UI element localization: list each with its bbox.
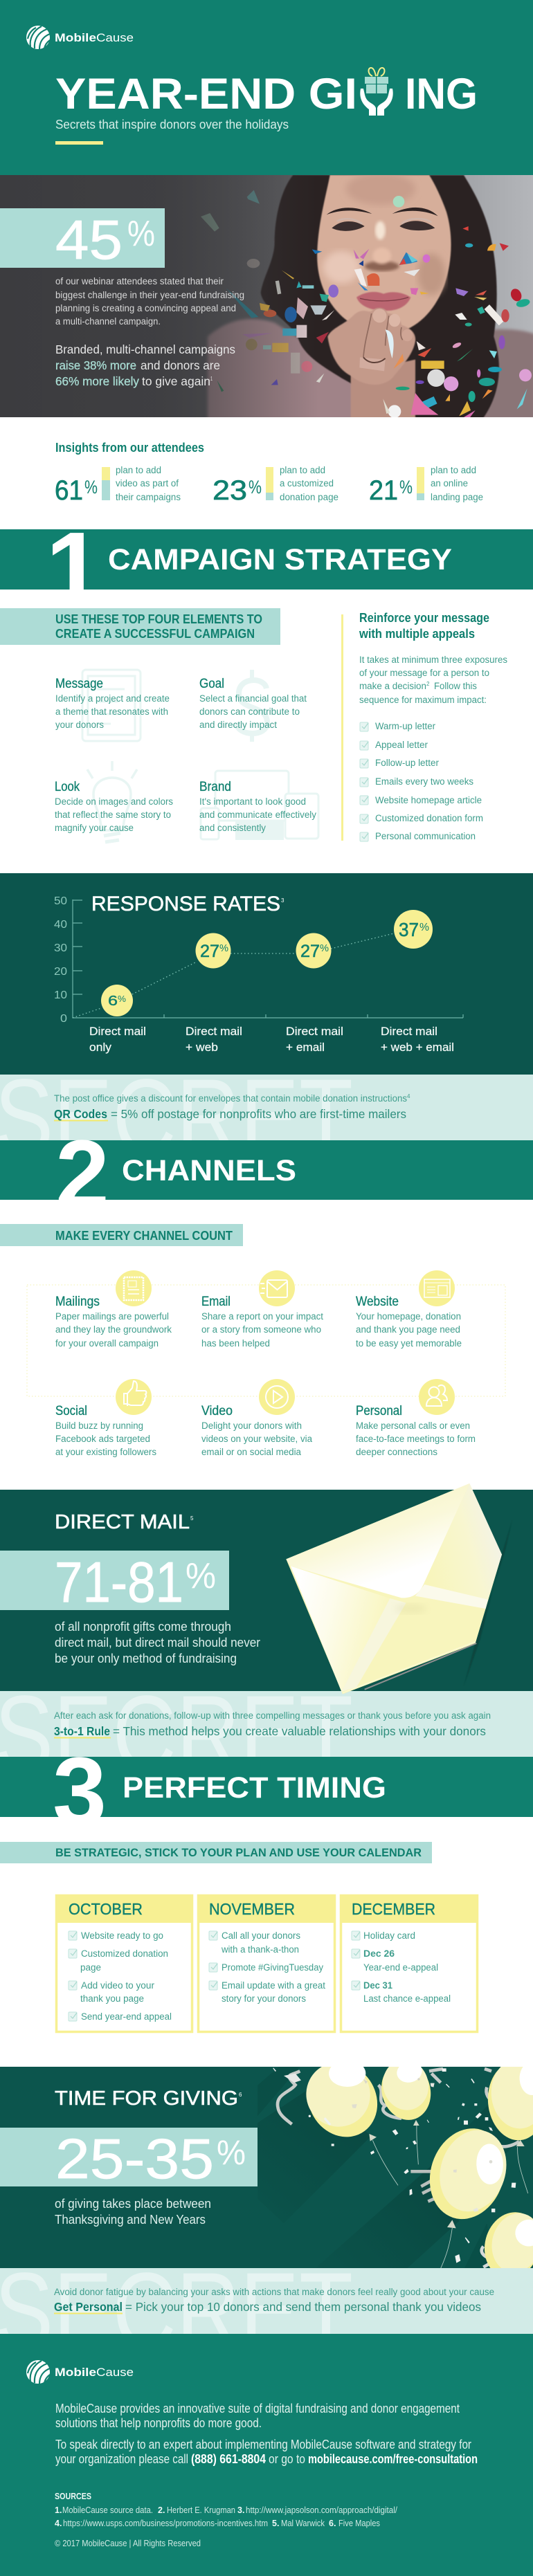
element: brand: It's important to look good — [199, 796, 306, 807]
highlighted tip: = Pick your top 10 donors and send them personal thank you videos — [125, 2300, 481, 2314]
statistic box — [0, 208, 165, 271]
chart title: RESPONSE RATES — [91, 893, 280, 915]
hero paragraph: of our webinar attendees stated that their — [55, 276, 224, 286]
logo — [26, 26, 134, 49]
data point: 37%: 37 — [399, 919, 419, 940]
calendar: december: Holiday card — [363, 1930, 415, 1941]
icon: people — [419, 1379, 455, 1415]
heading box: BE STRATEGIC, STICK TO YOUR PLAN AND USE YOUR CALENDAR — [55, 1846, 422, 1859]
channel: social: Social — [55, 1404, 87, 1418]
category labels: Direct mail — [89, 1025, 146, 1038]
watermark: SECRET — [0, 1057, 353, 1178]
element: goal: Select a financial goal that — [199, 693, 307, 704]
highlighted tip: 3-to-1 Rule — [54, 1724, 110, 1738]
stat: 61%: % — [84, 477, 98, 497]
element: message: Message — [55, 677, 103, 691]
heading: Insights from our attendees — [55, 441, 204, 455]
calendar: october: Send year-end appeal — [81, 2011, 172, 2022]
element: goal: donors can contribute to — [199, 706, 300, 717]
heading: Reinforce your message — [359, 611, 489, 625]
highlighted tip: = 5% off postage for nonprofits who are first-time mailers — [111, 1107, 406, 1121]
checklist — [360, 721, 483, 841]
paragraph: Follow this — [434, 681, 477, 691]
logo: Mobile — [55, 31, 96, 44]
axis labels: 10 — [54, 989, 67, 1001]
sources: 4. — [55, 2519, 62, 2528]
subtitle: Secrets that inspire donors over the holidays — [55, 118, 289, 131]
category labels: only — [89, 1041, 112, 1054]
checklist: Follow-up letter — [375, 758, 439, 768]
section band: 2 channels: CHANNELS — [122, 1154, 296, 1187]
channel: email: has been helped — [201, 1338, 270, 1349]
panel: secret get personal — [0, 2268, 533, 2334]
calendar: november: story for your donors — [222, 1993, 306, 2004]
sources: Mal Warwick — [281, 2519, 325, 2528]
element: look: magnify your cause — [55, 823, 134, 833]
calendar: december: Last chance e-appeal — [363, 1993, 451, 2004]
axis labels: 0 — [60, 1013, 67, 1025]
panel: insights from attendees — [55, 441, 483, 506]
hero paragraph: planning is creating a convincing appeal and — [55, 303, 236, 313]
section band: 3 perfect timing: PERFECT TIMING — [123, 1771, 386, 1805]
chart title: 3 — [281, 897, 284, 904]
checklist: Emails every two weeks — [375, 776, 473, 787]
channel: mailings: Paper mailings are powerful — [55, 1311, 169, 1322]
sources: Five Maples — [338, 2519, 380, 2528]
channel: mailings: and they lay the groundwork — [55, 1324, 172, 1335]
title: YEAR-END GI — [55, 70, 357, 118]
description: direct mail, but direct mail should never — [55, 1636, 260, 1650]
channel: email — [201, 1295, 323, 1349]
section band: 2 channels — [0, 1120, 533, 1228]
stat: 23% — [213, 465, 338, 506]
hero callout: Branded, multi-channel campaigns — [55, 342, 235, 356]
channel: email: or a story from someone who — [201, 1324, 321, 1335]
confetti — [201, 190, 532, 419]
panel: secret QR codes — [0, 1075, 533, 1140]
description: Thanksgiving and New Years — [55, 2213, 206, 2227]
sources: SOURCES — [55, 2491, 91, 2501]
data point: 27% email: 27 — [300, 942, 320, 961]
axis labels: 20 — [54, 966, 67, 978]
calendar: november — [197, 1894, 336, 2031]
calendar: november: Promote #GivingTuesday — [222, 1962, 323, 1973]
statistic box: 45 — [55, 209, 123, 271]
data point: 37% — [394, 910, 433, 949]
checklist: Personal communication — [375, 831, 476, 841]
sources: https://www.usps.com/business/promotions-incentives.htm — [63, 2519, 268, 2528]
checklist: Warm-up letter — [375, 721, 435, 731]
channel: social: at your existing followers — [55, 1447, 156, 1457]
description: of all nonprofit gifts come through — [55, 1620, 231, 1634]
stat: 21%: an online — [431, 478, 468, 488]
logo: Cause — [96, 31, 134, 44]
calendar: october: thank you page — [80, 1993, 144, 2004]
data point: 27% web: 27 — [200, 942, 219, 961]
data point: 27% web — [195, 933, 231, 969]
panel: direct mail — [0, 1490, 533, 1691]
tip text: After each ask for donations, follow-up with three compelling messages or thank yous before you ask again — [54, 1710, 491, 1721]
axis labels: 40 — [54, 919, 67, 931]
about text: solutions that help nonprofits do more good. — [55, 2416, 262, 2430]
icon: gift in hands — [360, 68, 393, 116]
paragraph: sequence for maximum impact: — [359, 695, 487, 705]
panel: footer — [0, 2334, 533, 2576]
panel: calendar — [0, 1842, 478, 2031]
stat: 21%: 21 — [369, 475, 398, 506]
panel: time for giving — [0, 2067, 533, 2268]
calendar: november: Call all your donors — [222, 1930, 300, 1941]
element: goal: Goal — [199, 677, 224, 691]
heading — [359, 611, 489, 641]
divider line — [341, 614, 343, 841]
tip footnote: 4 — [407, 1093, 410, 1099]
data point: 27% email: % — [320, 942, 329, 954]
data point: 6%: % — [118, 994, 126, 1004]
sources: 1. — [55, 2505, 62, 2515]
dark fade over left of photo — [118, 175, 307, 417]
title: ING — [405, 70, 478, 118]
dotted connector frame — [27, 1285, 505, 1396]
stat: 21% — [369, 465, 483, 506]
copyright: © 2017 MobileCause | All Rights Reserved — [55, 2539, 201, 2548]
stat: 21%: % — [399, 477, 413, 497]
calendar: december: Dec 26 — [363, 1948, 395, 1959]
calendar: october — [55, 1894, 193, 2031]
category labels — [89, 1025, 454, 1054]
channel: personal — [356, 1404, 476, 1457]
calendar: november: Email update with a great — [222, 1980, 325, 1991]
data point: 6%: 6 — [108, 994, 118, 1009]
yellow accent bar — [55, 141, 103, 145]
calendar: november: NOVEMBER — [209, 1900, 295, 1918]
hero callout: and donors are — [141, 358, 220, 372]
statistic box: % — [186, 1556, 216, 1596]
heading box — [0, 1842, 432, 1863]
data point: 37%: % — [419, 922, 429, 933]
category labels: + web — [186, 1041, 218, 1054]
stat: 61%: their campaigns — [116, 492, 181, 502]
channel: video: email or on social media — [201, 1447, 301, 1457]
channel: website: Website — [356, 1295, 399, 1309]
sources: 5. — [272, 2519, 279, 2528]
sources — [55, 2491, 397, 2528]
icon: light bulb — [87, 761, 137, 842]
sources: 3. — [237, 2505, 244, 2515]
category labels: + email — [286, 1041, 325, 1054]
face — [317, 175, 451, 335]
photo: woman blowing confetti — [0, 173, 533, 419]
channel: email: Share a report on your impact — [201, 1311, 323, 1322]
section band: 3 perfect timing — [0, 1737, 533, 1845]
channel: website: and thank you page need — [356, 1324, 460, 1335]
stat: 21%: landing page — [431, 492, 483, 502]
chart axes — [73, 899, 463, 1018]
element: look: Decide on images and colors — [55, 796, 173, 807]
channel: email: Email — [201, 1295, 231, 1309]
panel: header — [0, 0, 533, 175]
ring — [359, 357, 386, 371]
icon: envelope — [259, 1270, 295, 1306]
contact text: mobilecause.com/free-consultation — [308, 2452, 478, 2466]
tip text: The post office gives a discount for envelopes that contain mobile donation instructions — [54, 1093, 407, 1104]
calendar: december: Dec 31 — [363, 1980, 392, 1991]
section band: 3 perfect timing: 3 — [53, 1737, 107, 1845]
highlighted tip: QR Codes — [54, 1107, 107, 1121]
stat: 61%: 61 — [55, 475, 83, 506]
hero callout: 66% more likely — [55, 374, 139, 388]
calendar: december: DECEMBER — [352, 1900, 435, 1918]
stat: 61% — [55, 465, 181, 506]
element: message: your donors — [55, 720, 104, 730]
statistic box: 25-35 — [55, 2128, 214, 2191]
checklist: Website homepage article — [375, 795, 482, 805]
stat: 23%: 23 — [213, 475, 247, 506]
heading box: CREATE A SUCCESSFUL CAMPAIGN — [55, 627, 255, 641]
stat: 23%: donation page — [280, 492, 338, 502]
contact text: or go to — [269, 2452, 305, 2466]
calendar: october: page — [80, 1962, 101, 1973]
contact text: your organization please call — [55, 2452, 188, 2466]
channel: mailings: for your overall campaign — [55, 1338, 159, 1349]
hair — [261, 175, 499, 419]
balloon B — [381, 2067, 431, 2120]
section band: 1 campaign strategy: 1 — [46, 511, 102, 625]
contact text — [55, 2438, 478, 2466]
element: message: Identify a project and create — [55, 693, 170, 704]
checklist: Customized donation form — [375, 813, 483, 823]
channel: website: Your homepage, donation — [356, 1311, 461, 1322]
channel: social: Facebook ads targeted — [55, 1434, 150, 1444]
data point: 6% — [101, 985, 133, 1016]
channel: website — [356, 1295, 462, 1349]
axis labels: 30 — [54, 942, 67, 954]
sources: http://www.japsolson.com/approach/digital/ — [246, 2505, 397, 2515]
calendar: november: with a thank-a-thon — [221, 1944, 299, 1955]
paragraph: of your message for a person to — [359, 668, 489, 678]
contact text: (888) 661-8804 — [191, 2452, 266, 2466]
icon: tablet — [82, 670, 141, 741]
paragraph — [359, 655, 507, 705]
contact text: To speak directly to an expert about implementing MobileCause software and strategy for — [55, 2438, 471, 2451]
heading: with multiple appeals — [359, 627, 475, 641]
channel: mailings — [55, 1295, 172, 1349]
axis labels — [54, 895, 67, 1025]
hero callout: to give again — [142, 374, 210, 388]
channel: personal: deeper connections — [356, 1447, 437, 1457]
section band: 2 channels: 2 — [55, 1120, 109, 1228]
category labels: Direct mail — [286, 1025, 343, 1038]
neck and wrist — [351, 360, 415, 419]
calendar: december — [340, 1894, 478, 2031]
heading box — [0, 1224, 243, 1246]
channel: social: Build buzz by running — [55, 1421, 143, 1431]
heading box: USE THESE TOP FOUR ELEMENTS TO — [55, 612, 262, 626]
balloon E — [485, 2212, 533, 2268]
icon: web page — [419, 1270, 455, 1306]
heading: 5 — [190, 1515, 194, 1522]
paragraph: 2 — [426, 681, 430, 687]
heading box — [0, 608, 280, 645]
about text — [55, 2402, 460, 2430]
element: look: that reflect the same story to — [55, 810, 171, 820]
watermark: SECRET — [0, 2251, 353, 2371]
channel: video: Delight your donors with — [201, 1421, 302, 1431]
section band: 1 campaign strategy — [0, 511, 533, 625]
balloon C — [487, 2067, 533, 2141]
panel: hero photo with statistics — [0, 173, 533, 419]
paragraph: make a decision — [359, 681, 426, 691]
calendar: october: OCTOBER — [69, 1900, 143, 1918]
footer logo — [26, 2360, 134, 2384]
heading box: MAKE EVERY CHANNEL COUNT — [55, 1229, 233, 1243]
calendar: october: Website ready to go — [81, 1930, 163, 1941]
icon: devices — [201, 771, 318, 840]
stat: 21%: plan to add — [431, 465, 476, 475]
hero callout: 1 — [210, 376, 213, 382]
calendar: october: Add video to your — [81, 1980, 154, 1991]
element: brand — [199, 780, 316, 833]
calendar: october: Customized donation — [81, 1948, 168, 1959]
highlighted tip: = This method helps you create valuable relationships with your donors — [113, 1724, 486, 1738]
panel: make every channel count — [0, 1224, 505, 1457]
icon: thumbs up — [116, 1379, 152, 1415]
icon: stamp — [116, 1270, 152, 1306]
statistic box: % — [127, 214, 155, 254]
statistic box — [0, 2128, 258, 2191]
hero paragraph — [55, 276, 244, 327]
hero callout: raise 38% more — [55, 358, 136, 372]
illustration: envelope — [286, 1483, 512, 1694]
checklist: Appeal letter — [375, 740, 428, 750]
confetti — [273, 2067, 516, 2263]
element: goal: and directly impact — [199, 720, 277, 730]
element: brand: and communicate effectively — [199, 810, 316, 820]
category labels: Direct mail — [186, 1025, 242, 1038]
hand — [327, 308, 415, 385]
channel: personal: face-to-face meetings to form — [356, 1434, 476, 1444]
channel: website: to be easy yet memorable — [356, 1338, 462, 1349]
hero paragraph: biggest challenge in their year-end fundraising — [55, 290, 244, 300]
fur — [208, 319, 533, 419]
panel: top four elements — [0, 608, 318, 842]
nose — [375, 221, 386, 239]
statistic box: 71-81 — [55, 1550, 183, 1614]
data point: 27% web: % — [219, 942, 228, 954]
section band: 1 campaign strategy: CAMPAIGN STRATEGY — [108, 543, 452, 576]
category labels: Direct mail — [381, 1025, 437, 1038]
channel: video: videos on your website, via — [201, 1434, 312, 1444]
icon: play button — [259, 1379, 295, 1415]
stat: 23%: a customized — [280, 478, 334, 488]
data point: 27% email — [296, 933, 331, 969]
hero callout — [55, 342, 235, 388]
statistic box: % — [217, 2133, 246, 2172]
channel: video — [201, 1404, 312, 1457]
illustration: balloons and streamers — [210, 2049, 533, 2316]
long shadows — [271, 2091, 370, 2168]
sources: MobileCause source data. — [62, 2505, 153, 2515]
sources: 6. — [329, 2519, 336, 2528]
panel: response rates chart — [0, 873, 533, 1075]
panel: secret 3-to-1 rule — [0, 1691, 533, 1757]
channel: personal: Personal — [356, 1404, 402, 1418]
description: be your only method of fundraising — [55, 1652, 237, 1665]
brows and eyes — [327, 208, 438, 216]
stat: 23%: plan to add — [280, 465, 325, 475]
balloon A — [306, 2067, 378, 2137]
heading: TIME FOR GIVING — [55, 2088, 238, 2110]
stat: 23%: % — [249, 477, 262, 497]
channel: mailings: Mailings — [55, 1295, 100, 1309]
highlighted tip: Get Personal — [54, 2300, 123, 2314]
hero paragraph: a multi-channel campaign. — [55, 316, 161, 327]
stat: 61%: video as part of — [116, 478, 179, 488]
calendar: december: Year-end e-appeal — [363, 1962, 438, 1973]
element: look: Look — [55, 780, 80, 794]
element: look — [55, 780, 173, 833]
element: message — [55, 677, 170, 730]
element: message: a theme that resonates with — [55, 706, 168, 717]
category labels: + web + email — [381, 1041, 454, 1054]
description: of giving takes place between — [55, 2197, 211, 2211]
watermark: SECRET — [0, 1674, 353, 1794]
channel: social — [55, 1404, 156, 1457]
panel: multiple appeals — [359, 611, 507, 841]
element: goal — [199, 677, 307, 730]
sources: Herbert E. Krugman — [167, 2505, 235, 2515]
tip text: Avoid donor fatigue by balancing your asks with actions that make donors feel really good about your cause — [54, 2287, 494, 2297]
heading: DIRECT MAIL — [55, 1511, 190, 1533]
description — [55, 1620, 260, 1665]
element: brand: Brand — [199, 780, 231, 794]
element: brand: and consistently — [199, 823, 266, 833]
channel: video: Video — [201, 1404, 233, 1418]
balloon D — [429, 2128, 507, 2220]
sources: 2. — [158, 2505, 165, 2515]
paragraph: It takes at minimum three exposures — [359, 655, 507, 665]
title — [55, 70, 478, 118]
about text: MobileCause provides an innovative suite of digital fundraising and donor engagement — [55, 2402, 460, 2415]
icon: dollar sign — [237, 670, 267, 742]
heading: 6 — [239, 2092, 242, 2098]
stat: 61%: plan to add — [116, 465, 161, 475]
statistic box — [0, 1550, 229, 1614]
description — [55, 2197, 211, 2227]
channel: personal: Make personal calls or even — [356, 1421, 470, 1431]
footer logo: Mobile — [55, 2366, 96, 2379]
streamers — [278, 2069, 519, 2267]
footer logo: Cause — [96, 2366, 134, 2379]
lips — [356, 292, 410, 311]
axis labels: 50 — [54, 895, 67, 907]
dotted trend line — [73, 933, 394, 1018]
